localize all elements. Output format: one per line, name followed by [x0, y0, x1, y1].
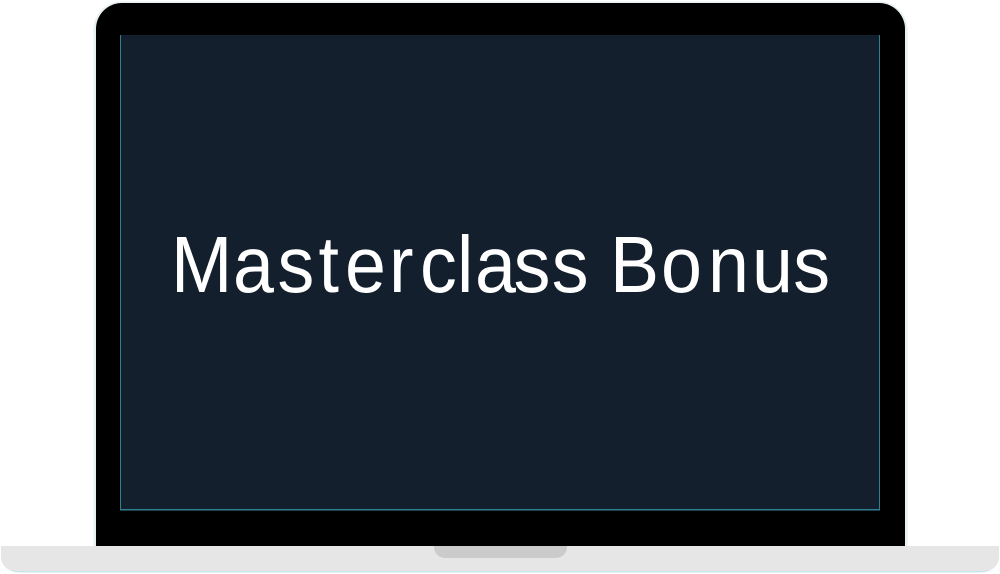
laptop base	[1, 546, 999, 572]
title: Masterclass Bonus: Masterclass Bonus	[171, 220, 830, 310]
laptop lid	[94, 2, 908, 547]
laptop notch	[434, 546, 567, 558]
laptop screen	[120, 35, 880, 510]
